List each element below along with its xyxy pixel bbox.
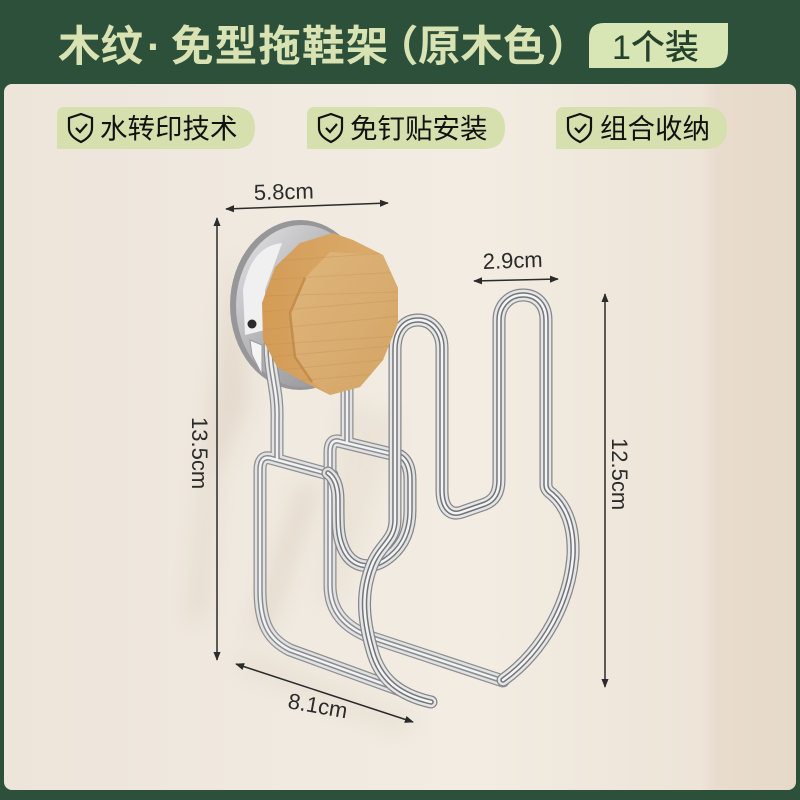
dimension: ear width 2.9cm: 2.9cm — [482, 247, 543, 274]
dimension: depth 8.1cm — [236, 664, 413, 723]
dimension: height 12.5cm: 12.5cm — [607, 438, 632, 510]
slipper rack: rabbit outline — [364, 295, 573, 702]
slipper rack: back frames — [260, 345, 503, 690]
feature tag: modular storage: 组合收纳 — [600, 113, 710, 144]
dimension: depth 8.1cm: 8.1cm — [286, 688, 349, 723]
title: 免型拖鞋架 — [171, 24, 390, 71]
dimension: height 13.5cm: 13.5cm — [187, 417, 212, 489]
wall shadow — [190, 250, 420, 735]
slipper rack: inner hook — [328, 456, 410, 566]
feature tag: water transfer printing — [57, 107, 255, 149]
badge: quantity — [589, 23, 728, 68]
title: ） — [547, 24, 590, 71]
feature tag: no-nail adhesive install — [307, 107, 505, 149]
dimension: width 5.8cm — [226, 178, 388, 209]
feature tag: modular storage — [556, 107, 727, 149]
title: · — [147, 24, 161, 71]
feature tag: no-nail adhesive install: 免钉贴安装 — [350, 113, 488, 144]
title: 木纹 — [58, 24, 143, 71]
dimension: width 5.8cm: 5.8cm — [253, 178, 314, 205]
badge: quantity: 1个装 — [612, 29, 699, 67]
feature tag: water transfer printing: 水转印技术 — [100, 113, 238, 144]
suction cup base — [230, 220, 370, 390]
wood knob — [260, 233, 400, 395]
title: 原木色 — [418, 24, 546, 71]
title: （ — [376, 24, 419, 71]
dimension: ear width 2.9cm — [474, 247, 558, 281]
